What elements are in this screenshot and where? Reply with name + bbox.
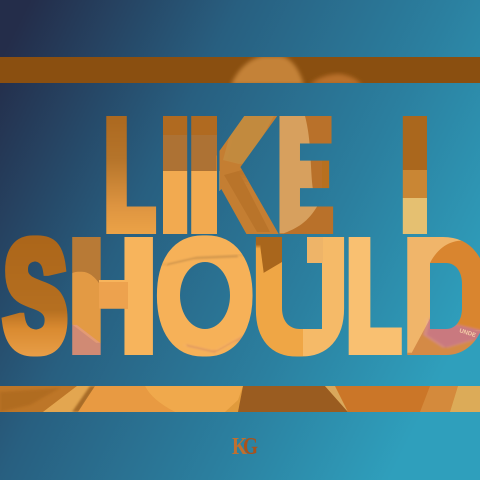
gap between K stem and arms xyxy=(217,116,220,234)
U counter xyxy=(282,236,322,329)
bottom photo band xyxy=(0,386,480,412)
title: SHOULD: U xyxy=(254,209,346,384)
D counter xyxy=(430,263,462,329)
top photo band xyxy=(0,57,480,83)
title: LIKE I xyxy=(106,88,428,263)
title: SHOULD: H xyxy=(70,209,155,384)
title: SHOULD: L xyxy=(348,209,400,384)
title: LIKE I: I xyxy=(401,88,428,263)
O counter xyxy=(180,262,230,329)
title: LIKE I: I xyxy=(162,88,189,263)
logo: KG monogram: G xyxy=(243,434,258,460)
title: SHOULD: S xyxy=(4,209,66,384)
logo: KG monogram: K xyxy=(232,434,247,460)
flag on the U stem xyxy=(307,237,323,263)
photo label inside the D: UNDE xyxy=(458,328,476,339)
title: LIKE I: L xyxy=(106,88,154,263)
title: LIKE I: K xyxy=(189,88,270,263)
title: SHOULD: O xyxy=(158,209,252,384)
title: LIKE I: E xyxy=(279,88,332,263)
title: SHOULD xyxy=(4,209,480,384)
